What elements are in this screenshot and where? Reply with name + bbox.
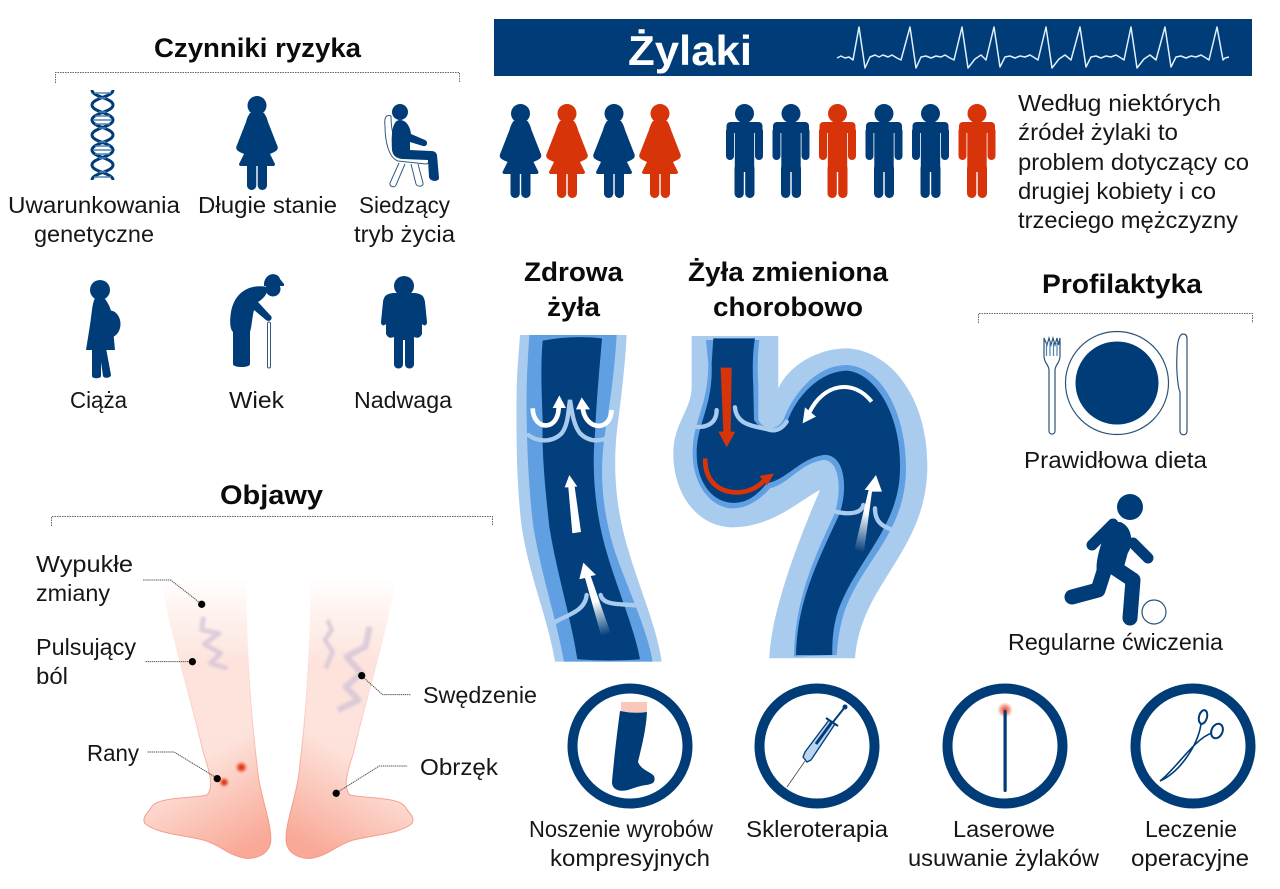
valves	[528, 400, 640, 622]
heading: Profilaktyka: Profilaktyka	[1042, 269, 1203, 299]
icon: overweight person	[381, 276, 427, 368]
label: Uwarunkowania genetyczne: Uwarunkowania	[8, 192, 180, 218]
labels: symptoms: ból	[36, 663, 68, 689]
label: Długie stanie: Długie stanie	[198, 192, 337, 218]
arrow: reflux curve	[705, 458, 774, 492]
callout: Rany	[148, 752, 221, 782]
icon: elderly man with cane	[230, 274, 284, 368]
label: Laserowe usuwanie żylaków: Laserowe	[953, 816, 1055, 842]
icon: syringe	[760, 688, 874, 804]
icon: pregnant woman	[86, 280, 120, 378]
label: Noszenie wyrobów kompresyjnych	[529, 816, 713, 871]
icon: plate fork knife	[1044, 332, 1187, 435]
title: Żylaki: Żylaki	[628, 27, 752, 74]
arrow: white gradient up	[854, 475, 882, 552]
label: Siedzący tryb życia: tryb życia	[354, 221, 455, 247]
labels: symptoms: Wypukłe	[36, 551, 133, 577]
icon: DNA	[92, 90, 113, 180]
labels: symptoms: Rany	[87, 740, 139, 766]
heading: Zdrowa żyła	[524, 257, 624, 322]
arrow: white curve	[803, 387, 872, 423]
icon: ECG line	[837, 27, 1229, 68]
pictogram: men affected	[726, 104, 996, 198]
text: prevalence statement: źródeł żylaki to	[1018, 119, 1178, 145]
label: Wiek: Wiek	[229, 387, 285, 413]
callout: Obrzęk	[333, 766, 407, 797]
panel: prevention	[1008, 332, 1223, 655]
illustration: healthy vein	[516, 335, 662, 662]
labels: symptoms: Pulsujący	[36, 634, 137, 660]
text: prevalence statement	[1018, 90, 1249, 233]
heading: Czynniki ryzyka: Czynniki ryzyka	[154, 33, 362, 63]
text: prevalence statement: problem dotyczący co	[1018, 149, 1249, 175]
panel: treatments	[529, 688, 1250, 871]
callout: Wypukłe zmiany	[143, 580, 205, 608]
heading: Zdrowa żyła: żyła	[547, 292, 601, 322]
heading: Żyła zmieniona chorobowo: chorobowo	[713, 292, 863, 322]
text: prevalence statement: Według niektórych	[1018, 90, 1221, 116]
label: Laserowe usuwanie żylaków: usuwanie żylaków	[908, 845, 1099, 871]
arrow: reflux down	[718, 368, 735, 447]
text: prevalence statement: drugiej kobiety i co	[1018, 178, 1216, 204]
pictogram: women affected	[500, 104, 681, 198]
panel: risk factors	[8, 90, 455, 413]
heading: Żyła zmieniona chorobowo	[688, 257, 889, 322]
label: Leczenie operacyjne: operacyjne	[1131, 845, 1249, 871]
heading: Żyła zmieniona chorobowo: Żyła zmieniona	[688, 257, 889, 287]
label: Prawidłowa dieta: Prawidłowa dieta	[1024, 447, 1207, 473]
label: Regularne ćwiczenia: Regularne ćwiczenia	[1008, 629, 1223, 655]
label: Uwarunkowania genetyczne	[8, 192, 180, 247]
illustration: left leg	[144, 580, 271, 858]
label: Ciąża: Ciąża	[70, 387, 127, 413]
illustration: right leg	[286, 580, 413, 858]
heading: Zdrowa żyła: Zdrowa	[524, 257, 624, 287]
icon: laser fibre	[948, 688, 1062, 804]
label: Laserowe usuwanie żylaków	[908, 816, 1099, 871]
label: Siedzący tryb życia: Siedzący	[359, 192, 450, 218]
illustration: diseased vein	[673, 336, 927, 658]
callout: Swędzenie	[358, 672, 410, 695]
icon: sitting person	[385, 104, 439, 187]
labels: symptoms	[36, 551, 537, 780]
arrows	[533, 405, 612, 426]
label: Siedzący tryb życia	[354, 192, 455, 247]
icon: surgical forceps	[1136, 688, 1250, 804]
icon: standing woman	[236, 96, 278, 190]
panel: symptoms legs	[143, 580, 413, 858]
labels: symptoms: Swędzenie	[423, 682, 537, 708]
label: Skleroterapia: Skleroterapia	[746, 816, 888, 842]
label: Noszenie wyrobów kompresyjnych: kompresyjnych	[550, 845, 710, 871]
labels: symptoms: Obrzęk	[420, 754, 499, 780]
label: Leczenie operacyjne	[1131, 816, 1249, 871]
label: Uwarunkowania genetyczne: genetyczne	[34, 221, 154, 247]
label: Leczenie operacyjne: Leczenie	[1145, 816, 1237, 842]
callout: Pulsujący ból	[146, 658, 196, 665]
icon: running with ball	[1072, 494, 1166, 624]
icon: compression stocking	[572, 688, 688, 804]
labels: symptoms: zmiany	[36, 580, 111, 606]
heading: Objawy: Objawy	[220, 480, 323, 510]
valves	[694, 407, 897, 532]
text: prevalence statement: trzeciego mężczyzny	[1018, 207, 1239, 233]
label: Nadwaga: Nadwaga	[354, 387, 452, 413]
title banner	[494, 19, 1252, 76]
label: Noszenie wyrobów kompresyjnych: Noszenie wyrobów	[529, 816, 713, 842]
